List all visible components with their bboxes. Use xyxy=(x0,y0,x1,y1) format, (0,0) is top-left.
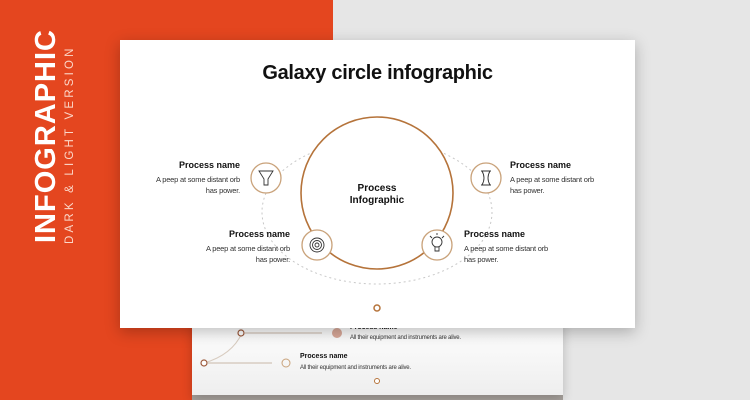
item bottom-right: Process name xyxy=(464,229,525,239)
second card: All their equipment and instruments are alive. xyxy=(350,335,461,341)
item bottom-right: A peep at some distant orb xyxy=(464,244,548,253)
item bottom-right: has power. xyxy=(464,255,498,264)
item top-right xyxy=(510,160,594,195)
item bottom-left: Process name xyxy=(229,229,290,239)
bottom strip xyxy=(192,393,563,400)
title: Galaxy circle infographic xyxy=(262,62,493,84)
vertical title INFOGRAPHIC: INFOGRAPHIC xyxy=(30,29,62,243)
process text rows: Process name xyxy=(350,324,397,331)
item bottom-left: has power. xyxy=(256,255,290,264)
orange background panel xyxy=(0,0,333,400)
second card xyxy=(192,320,563,395)
second card: All their equipment and instruments are alive. xyxy=(300,365,411,371)
main card xyxy=(120,40,635,328)
item top-right: A peep at some distant orb xyxy=(510,175,594,184)
center label xyxy=(350,183,404,206)
item top-left: Process name xyxy=(179,160,240,170)
item top-left: A peep at some distant orb has power. xyxy=(156,175,240,195)
item top-left xyxy=(156,160,240,195)
vertical subtitle: DARK & LIGHT VERSION xyxy=(64,45,76,244)
second card: Process name xyxy=(300,353,347,360)
item top-right: has power. xyxy=(510,186,544,195)
item bottom-left xyxy=(206,229,290,264)
center label: Infographic xyxy=(350,195,404,206)
circle diagram xyxy=(250,116,502,312)
item bottom-left: A peep at some distant orb xyxy=(206,244,290,253)
item top-right: Process name xyxy=(510,160,571,170)
center label: Process xyxy=(358,183,396,194)
item bottom-right xyxy=(464,229,548,264)
